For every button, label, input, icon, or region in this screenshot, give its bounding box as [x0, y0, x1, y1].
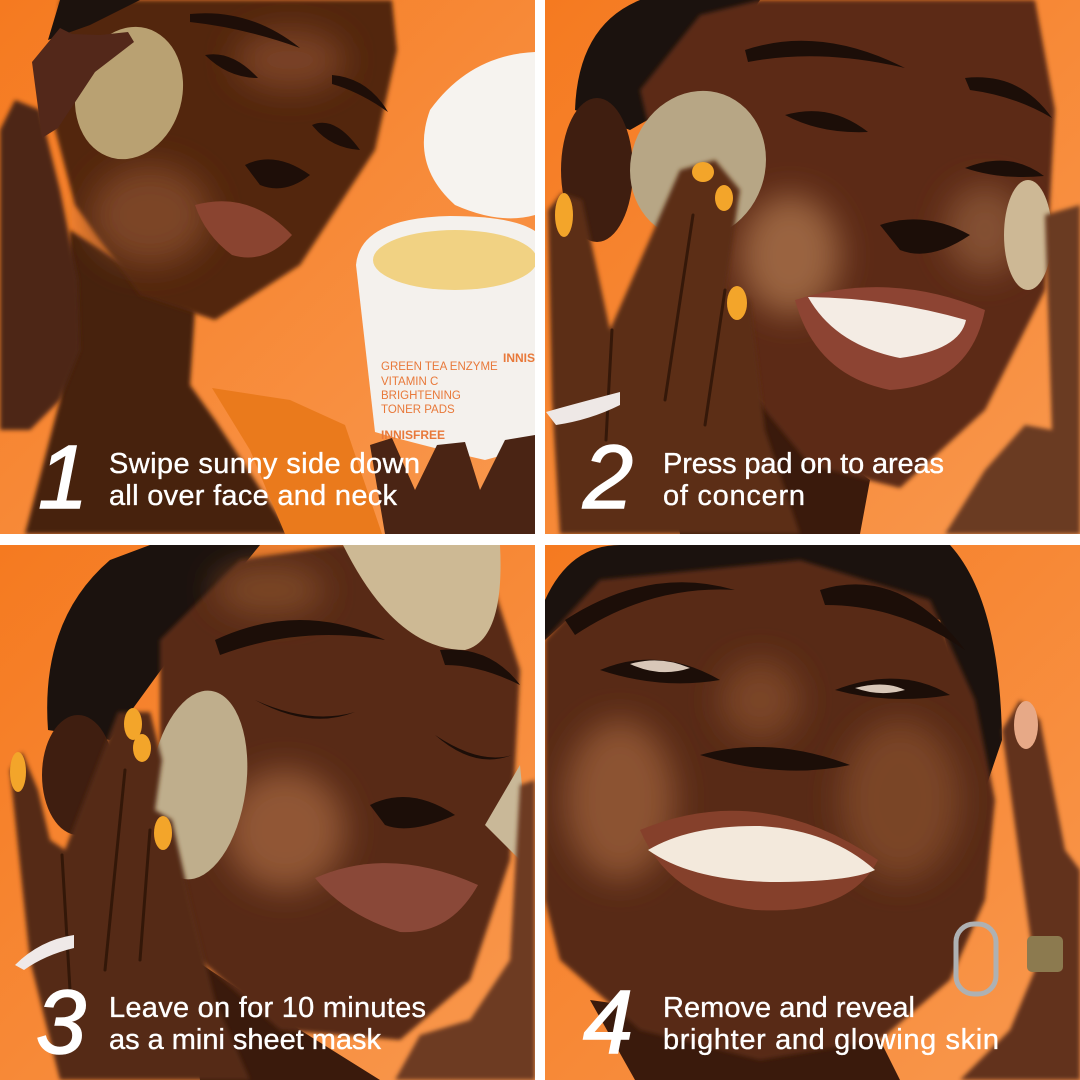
left hand [548, 160, 800, 534]
pad [75, 26, 184, 160]
hair [47, 545, 260, 740]
pad cheek [137, 684, 259, 886]
eyebrows and eyes [745, 41, 1052, 254]
right hand [395, 780, 535, 1080]
pad right [1004, 180, 1052, 290]
brows and eyes [565, 582, 965, 771]
number 2: 2 [582, 428, 633, 528]
neck [180, 950, 380, 1080]
teeth [808, 297, 966, 358]
face highlight [90, 165, 210, 265]
number 4: 4 [583, 973, 633, 1073]
lips [795, 287, 985, 390]
hair [48, 0, 140, 40]
nails [10, 708, 172, 850]
jar label: BRIGHTENING [381, 390, 461, 402]
ear [561, 98, 633, 242]
face highlight right [840, 720, 960, 880]
face highlight [225, 770, 345, 890]
jar label: GREEN TEA ENZYME [381, 361, 498, 373]
nail [1014, 701, 1038, 749]
pad right [485, 765, 530, 870]
panel: step 1 [0, 0, 540, 534]
caption 2: of concern [663, 480, 805, 512]
neck [680, 402, 870, 534]
face [545, 560, 995, 1060]
jar label [381, 351, 535, 442]
ring [546, 392, 620, 425]
caption 3: Leave on for 10 minutes [109, 992, 426, 1024]
left hand [10, 712, 250, 1080]
caption 3: as a mini sheet mask [109, 1024, 382, 1056]
face [160, 545, 520, 1040]
number 1: 1 [38, 428, 88, 528]
jar lid [424, 52, 535, 218]
eyes [190, 13, 388, 188]
jar label: INNIS [503, 351, 535, 365]
face [640, 0, 1055, 488]
caption 1: Swipe sunny side down [109, 448, 420, 480]
face highlight right [945, 185, 1025, 275]
earring [956, 924, 996, 994]
hair [575, 0, 760, 130]
jar label: TONER PADS [381, 404, 455, 416]
face highlight upper [235, 30, 345, 90]
hair [545, 545, 1002, 790]
nails [555, 162, 747, 320]
face highlight nose [720, 660, 800, 740]
pad left [630, 90, 766, 228]
upper fingers [32, 28, 134, 138]
ear [42, 715, 114, 835]
eye whites [630, 660, 905, 693]
neck [590, 1000, 900, 1080]
face highlight forehead [215, 565, 325, 615]
face [50, 0, 397, 320]
ring [1027, 936, 1063, 972]
caption 4: brighter and glowing skin [663, 1024, 999, 1056]
ring [15, 935, 74, 970]
jar contents [373, 230, 537, 290]
caption 4: Remove and reveal [663, 992, 915, 1024]
jar label: VITAMIN C [381, 376, 438, 388]
neck and chest [25, 230, 290, 534]
lips [315, 863, 478, 932]
orange dress [212, 388, 382, 534]
face highlight [740, 195, 840, 315]
lips [195, 201, 292, 258]
panel: step 3 [0, 545, 535, 1080]
jar label: INNISFREE [381, 428, 445, 442]
brows and closed eyes [215, 620, 520, 828]
panel: step 4 [545, 545, 1080, 1080]
right hand [945, 205, 1080, 534]
finger creases [606, 215, 725, 440]
finger creases [62, 770, 150, 990]
right hand [960, 700, 1080, 1080]
face highlight [565, 720, 675, 880]
teeth [648, 826, 875, 882]
caption 1: all over face and neck [109, 480, 398, 512]
number 3: 3 [36, 973, 86, 1073]
jar body [356, 216, 540, 460]
lips [640, 811, 878, 910]
panel: step 2 [545, 0, 1080, 534]
bottom fingers [370, 435, 535, 534]
pad top [343, 545, 501, 650]
hand [0, 100, 80, 430]
caption 2: Press pad on to areas [663, 448, 944, 480]
